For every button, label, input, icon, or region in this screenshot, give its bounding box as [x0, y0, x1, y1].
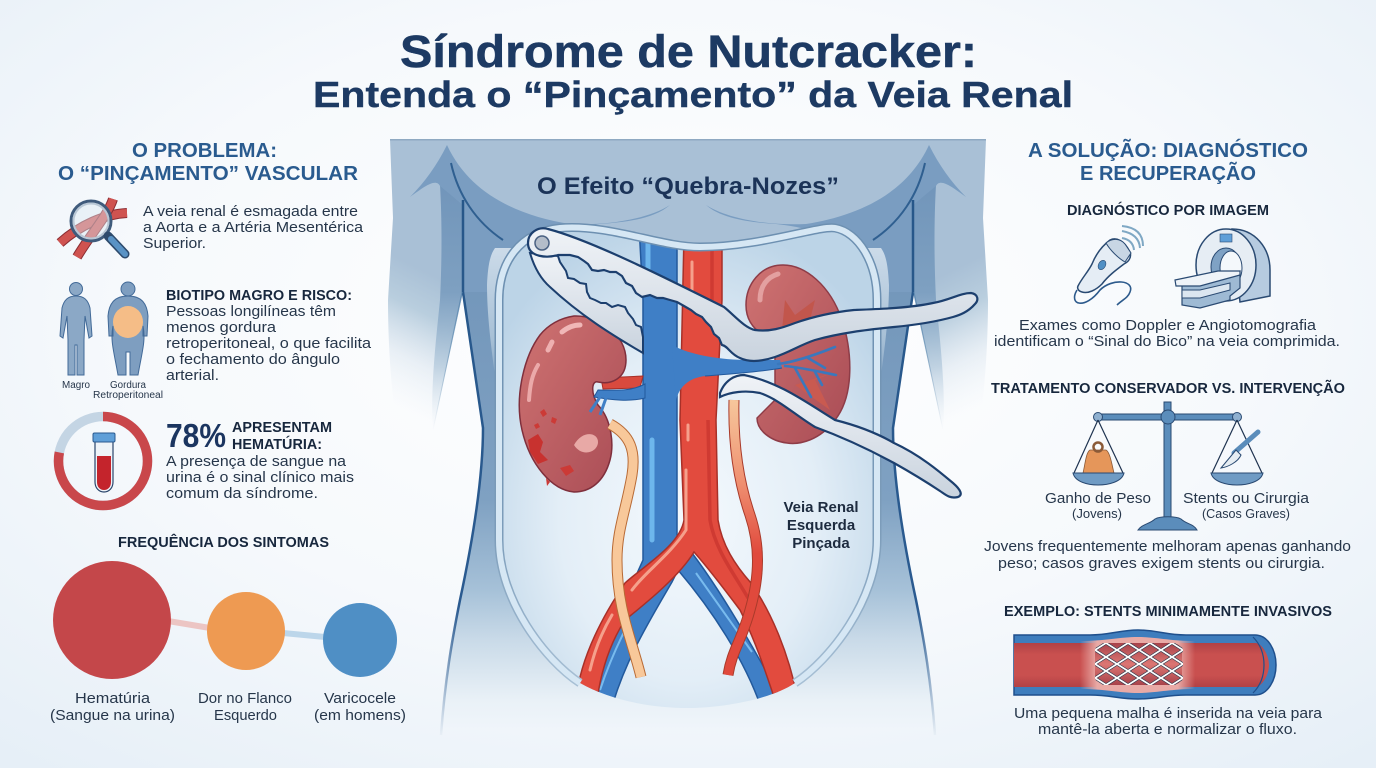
- heading: O Efeito Quebra-Nozes: O Efeito “Quebra-Nozes”: [537, 173, 839, 200]
- heading: solution: A SOLUÇÃO: DIAGNÓSTICO: [1028, 138, 1308, 162]
- text: compression: Superior.: [143, 235, 206, 252]
- cavity rim: [499, 228, 877, 683]
- nutcracker pliers: [528, 228, 977, 498]
- title: Entenda o “Pinçamento” da Veia Renal: [313, 74, 1073, 115]
- heading: problem: O “PINÇAMENTO” VASCULAR: [58, 163, 359, 185]
- text: stent description: mantê-la aberta e normalizar o fluxo.: [1038, 721, 1297, 738]
- text: treatment description: peso; casos graves exigem stents ou cirurgia.: [998, 555, 1325, 572]
- labels: treatments: Stents ou Cirurgia: [1183, 490, 1310, 507]
- text: biotype: retroperitoneal, o que facilita: [166, 335, 372, 352]
- left renal vein: [672, 345, 836, 400]
- right kidney: [746, 265, 850, 443]
- title: Síndrome de Nutcracker:: [400, 26, 977, 77]
- heading: solution: E RECUPERAÇÃO: [1080, 162, 1256, 185]
- text: 78% stat: 78%: [166, 417, 226, 454]
- label: Veia Renal Esquerda Pinçada: Esquerda: [787, 517, 856, 534]
- right ureter: [728, 400, 758, 675]
- labels: symptoms: Esquerdo: [214, 707, 277, 724]
- text: 78% stat: HEMATÚRIA:: [232, 435, 322, 453]
- text: biotype: Pessoas longilíneas têm: [166, 303, 336, 320]
- vessels group: [519, 225, 850, 710]
- heading: imaging: DIAGNÓSTICO POR IMAGEM: [1067, 201, 1269, 219]
- donut chart: 78%: [58, 416, 148, 506]
- labels: symptoms: Dor no Flanco: [198, 690, 292, 707]
- chart: symptom bubbles: [53, 561, 397, 679]
- labels: figures: Magro: [62, 380, 90, 391]
- text: compression: A veia renal é esmagada entre: [143, 203, 358, 220]
- text: biotype: menos gordura: [166, 319, 277, 336]
- labels: symptoms: Varicocele: [324, 690, 396, 707]
- bubble: varicocele: [323, 603, 397, 677]
- abdominal cavity: [499, 228, 877, 708]
- label: Veia Renal Esquerda Pinçada: Veia Renal: [783, 499, 859, 516]
- labels: symptoms: (em homens): [314, 707, 406, 724]
- text: 78% stat: comum da síndrome.: [166, 485, 318, 502]
- aorta: [576, 235, 798, 700]
- labels: figures: [62, 380, 163, 401]
- labels: treatments: Ganho de Peso: [1045, 490, 1151, 507]
- vena cava: [596, 242, 778, 699]
- heading: problem: O PROBLEMA:: [132, 140, 277, 162]
- title: [313, 26, 1073, 115]
- text: compression: [143, 203, 364, 252]
- panel: left column - the problem: [50, 140, 406, 724]
- icon: test tube: [93, 433, 115, 492]
- icon: body figure with retroperitoneal fat: [108, 282, 148, 375]
- icon: CT scanner: [1175, 229, 1270, 308]
- labels: treatments: [1045, 490, 1310, 521]
- text: stent description: [1014, 705, 1323, 738]
- torso upper body: [388, 139, 988, 735]
- text: treatment description: Jovens frequentemente melhoram apenas ganhando: [984, 538, 1351, 555]
- heading: problem: [58, 140, 359, 185]
- right renal connections to left kidney: [590, 384, 645, 415]
- text: 78% stat: [166, 417, 354, 502]
- left pan with weight: [1073, 420, 1124, 485]
- left kidney: [519, 316, 643, 492]
- heading: stents: EXEMPLO: STENTS MINIMAMENTE INVASIVOS: [1004, 604, 1332, 620]
- right pan with scalpel: [1211, 420, 1263, 485]
- icon: magnifying glass on compressed vessels: [60, 199, 127, 257]
- labels: treatments: (Jovens): [1072, 507, 1122, 521]
- label: Veia Renal Esquerda Pinçada: [783, 499, 859, 552]
- icon: thin body figure: [60, 282, 92, 375]
- text: imaging description: [994, 317, 1340, 350]
- text: biotype: arterial.: [166, 367, 219, 384]
- icon: ultrasound probe: [1074, 226, 1143, 305]
- left ureter: [610, 424, 641, 677]
- text: biotype: [166, 288, 372, 384]
- text: biotype: o fechamento do ângulo: [166, 351, 340, 368]
- stent mesh: [1095, 643, 1183, 685]
- labels: symptoms: (Sangue na urina): [50, 707, 175, 724]
- heading: solution: [1028, 138, 1308, 185]
- icon: balance scale: [1073, 402, 1263, 530]
- upper arm: [528, 228, 977, 361]
- labels: treatments: (Casos Graves): [1202, 507, 1290, 521]
- bubble: flank pain: [207, 592, 285, 670]
- text: 78% stat: APRESENTAM: [232, 420, 332, 436]
- labels: symptoms: [50, 690, 406, 724]
- icon: vein with stent: [1014, 630, 1276, 699]
- bubble: hematuria: [53, 561, 171, 679]
- lower arm right: [720, 375, 961, 498]
- heading: symptom frequency: FREQUÊNCIA DOS SINTOMAS: [118, 533, 329, 551]
- jaw lower left: [530, 253, 643, 353]
- labels: figures: Gordura: [110, 380, 146, 391]
- text: 78% stat: A presença de sangue na: [166, 453, 347, 470]
- labels: figures: Retroperitoneal: [93, 390, 163, 401]
- text: imaging description: Exames como Doppler e Angiotomografia: [1019, 317, 1317, 334]
- text: imaging description: identificam o “Sinal do Bico” na veia comprimida.: [994, 333, 1340, 350]
- text: treatment description: [984, 538, 1351, 572]
- label: Veia Renal Esquerda Pinçada: Pinçada: [792, 535, 850, 552]
- labels: symptoms: Hematúria: [75, 690, 151, 707]
- heading: treatment: TRATAMENTO CONSERVADOR VS. INTERVENÇÃO: [991, 379, 1345, 397]
- pivot: [535, 236, 549, 250]
- text: biotype: BIOTIPO MAGRO E RISCO:: [166, 288, 352, 304]
- panel: right column - the solution: [984, 138, 1351, 738]
- text: compression: a Aorta e a Artéria Mesentérica: [143, 219, 364, 236]
- text: stent description: Uma pequena malha é inserida na veia para: [1014, 705, 1323, 722]
- panel: central anatomy illustration: [388, 139, 988, 735]
- text: 78% stat: urina é o sinal clínico mais: [166, 469, 354, 486]
